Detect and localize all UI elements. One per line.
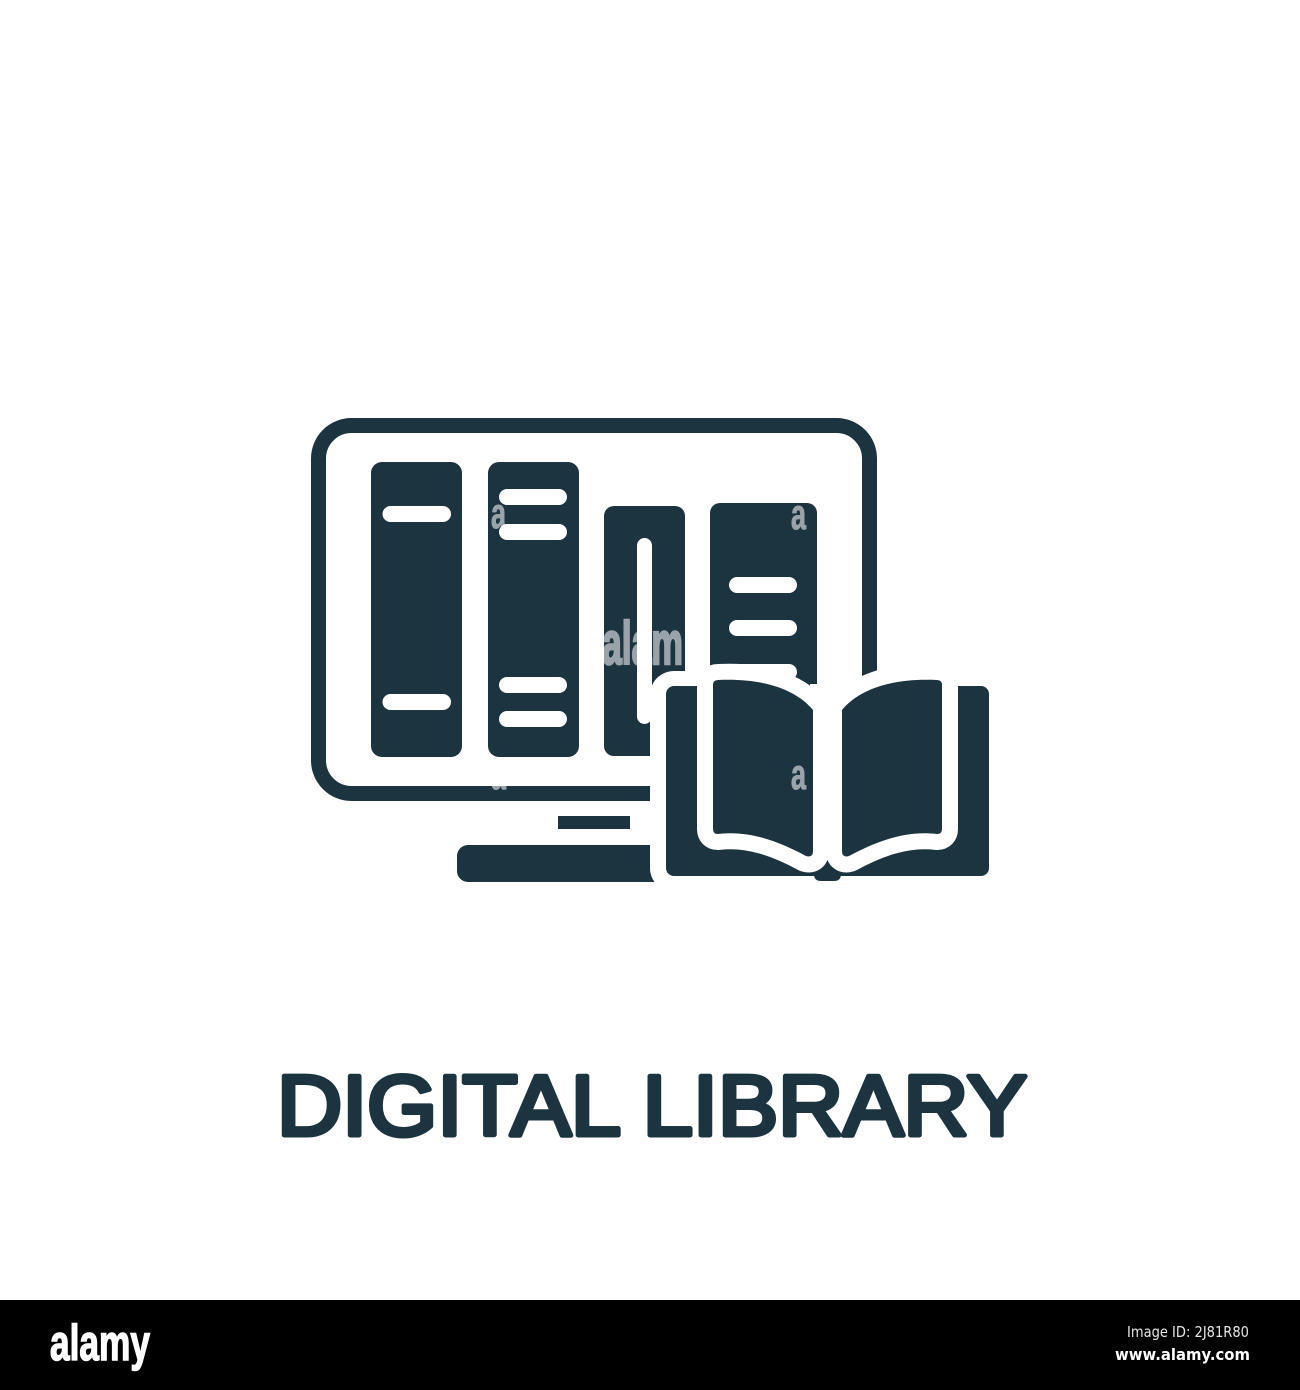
watermark letters over the icon: a [491, 490, 507, 538]
website: www.alamy.com [1115, 1345, 1250, 1364]
icon: book spine 1 [371, 462, 462, 757]
icon: open book [650, 671, 989, 892]
watermark letters over the icon: a [791, 751, 807, 799]
watermark letters over the icon: a [491, 751, 507, 799]
footer logo: alamy [50, 1315, 150, 1371]
title: DIGITAL LIBRARY [277, 1059, 1027, 1154]
icon: book spine 3 [604, 506, 685, 756]
watermark letters over the icon: a [791, 491, 807, 539]
image id: Image ID: 2J81R80 [1127, 1323, 1249, 1341]
watermark letters over the icon [491, 490, 807, 799]
icon: book spine 4 [710, 503, 817, 733]
icon: computer monitor [318, 426, 870, 882]
icon: book spine 2 [488, 462, 579, 757]
icon: digital library [318, 426, 989, 892]
watermark letters over the icon: alam [602, 610, 683, 677]
footer bar [0, 1300, 1300, 1390]
